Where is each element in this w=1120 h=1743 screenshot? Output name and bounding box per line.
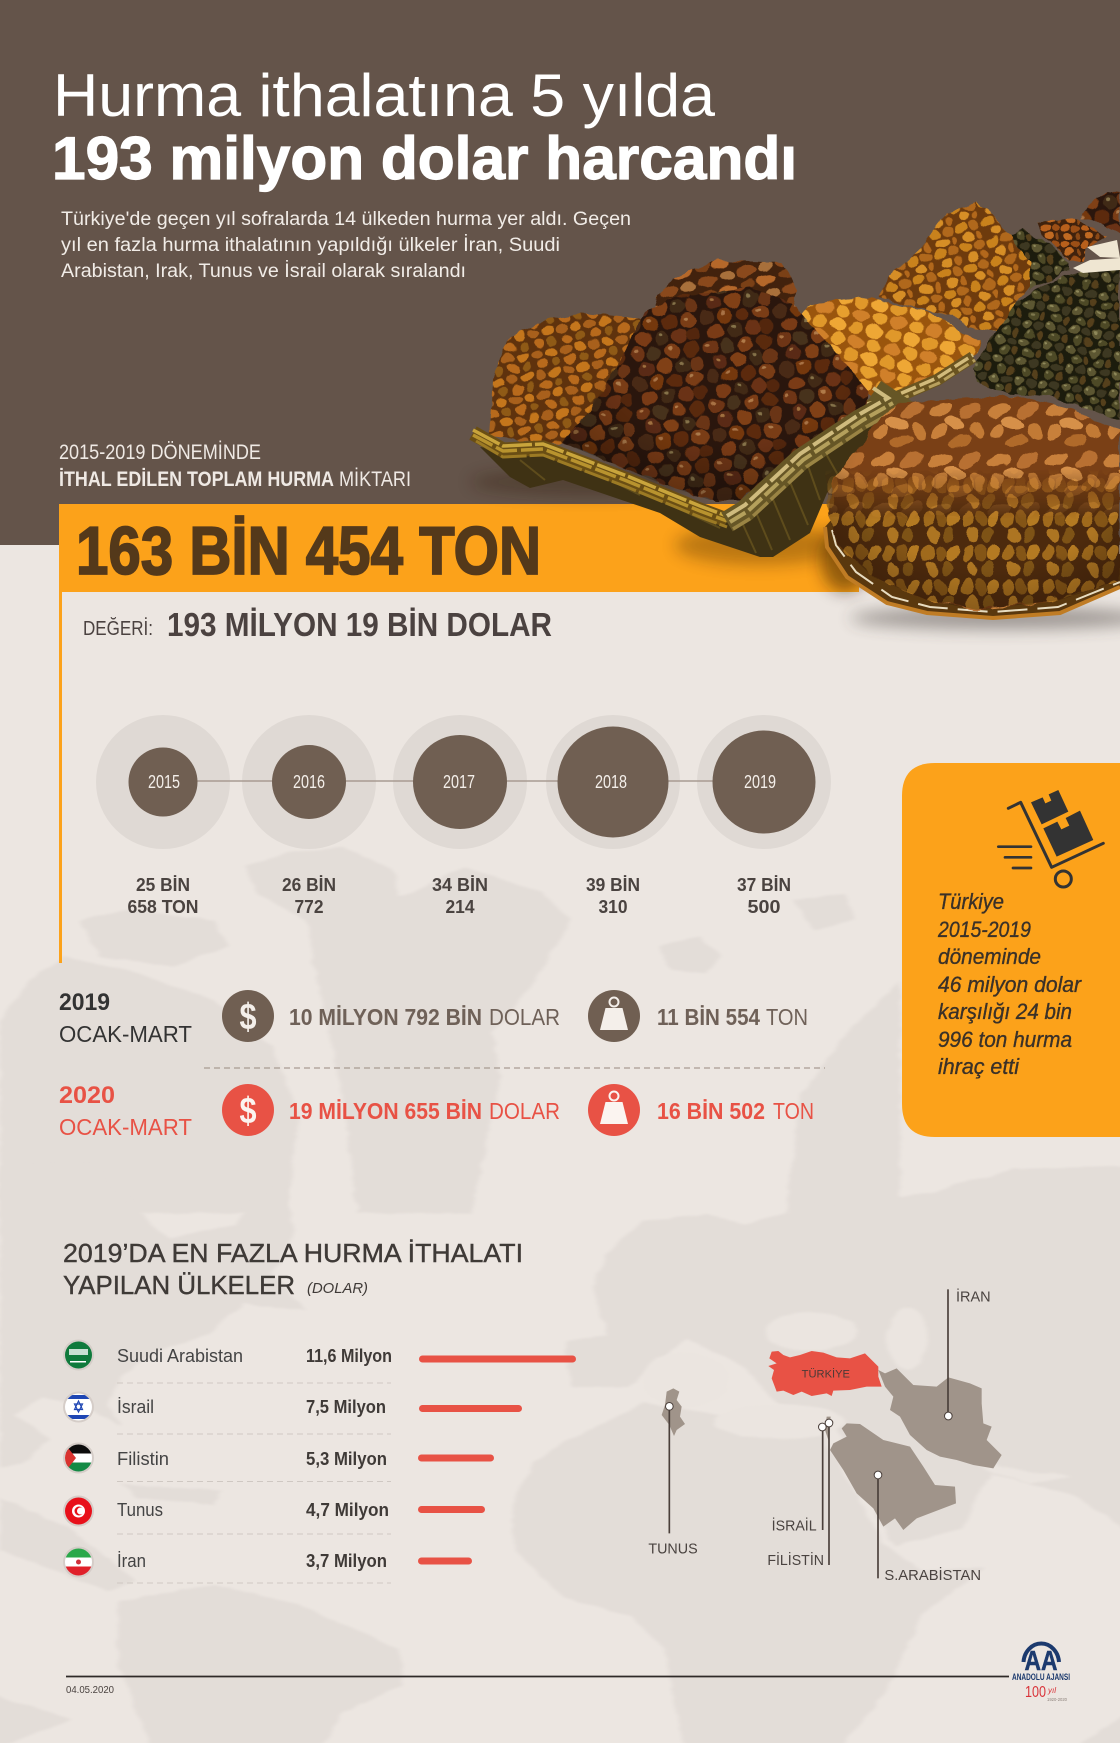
value 2020: DOLAR	[489, 1098, 560, 1124]
icon: Iran flag	[63, 1546, 94, 1578]
date: 04.05.2020	[66, 1685, 114, 1696]
row: Filistin	[63, 1442, 494, 1474]
rear basket rim	[863, 357, 973, 407]
total value line: 193 MİLYON 19 BİN DOLAR	[167, 606, 552, 643]
year labels: 2016	[293, 772, 325, 792]
title	[52, 62, 797, 192]
section heading: YAPILAN ÜLKELER	[63, 1270, 295, 1300]
inner circles scaled by volume	[128, 726, 816, 838]
yearly tonnage labels: 37 BİN	[737, 875, 791, 895]
row: Tunus	[63, 1496, 485, 1526]
row: İsrail	[63, 1392, 522, 1422]
Israel and Palestine shape	[825, 1417, 831, 1440]
year labels: 2015	[148, 772, 180, 792]
country locator map	[648, 1288, 1002, 1584]
intro text block: yıl en fazla hurma ithalatının yapıldığı ülkeler İran, Suudi	[61, 235, 560, 256]
logo: Anadolu Ajansı: ANADOLU AJANSI	[1012, 1672, 1070, 1682]
intro text block: Arabistan, Irak, Tunus ve İsrail olarak sıralandı	[61, 261, 466, 282]
row: Suudi Arabistan	[63, 1340, 576, 1370]
front tray of dates	[825, 397, 1120, 618]
orange total band	[59, 504, 859, 592]
outer circles	[96, 715, 831, 849]
tonnage 2020: TON	[773, 1098, 814, 1124]
pin: Israel	[772, 1423, 826, 1535]
timeline: imports by year	[96, 715, 831, 917]
title: Hurma ithalatına 5 yılda	[53, 62, 716, 129]
pin: Iran	[944, 1288, 991, 1420]
pin: Israel: İSRAİL	[772, 1517, 817, 1535]
Turkey label: TÜRKİYE	[802, 1368, 850, 1381]
ranking table	[63, 1340, 576, 1583]
intro text block: Türkiye'de geçen yıl sofralarda 14 ülkeden hurma yer aldı. Geçen	[61, 209, 631, 230]
icon: weight	[588, 990, 640, 1042]
pin: Palestine: FİLİSTİN	[767, 1551, 824, 1569]
icon: Israel flag	[63, 1392, 94, 1422]
yearly tonnage labels: 34 BİN	[432, 875, 488, 895]
panel: export callout	[902, 763, 1120, 1137]
callout text: Türkiye	[938, 889, 1004, 914]
row label 2019: OCAK-MART	[59, 1021, 192, 1047]
pin: Tunisia	[648, 1402, 698, 1557]
year labels	[148, 772, 776, 792]
orange vertical rule	[59, 592, 62, 963]
callout text: döneminde	[938, 944, 1041, 969]
callout text: 46 milyon dolar	[938, 972, 1083, 997]
map seas	[643, 1307, 1071, 1484]
icon: Tunisia flag	[63, 1496, 94, 1526]
bar	[418, 1558, 472, 1564]
icon: Palestine flag	[63, 1442, 94, 1474]
icon: dollar red: $	[240, 1090, 257, 1131]
yearly tonnage labels: 25 BİN	[136, 875, 190, 895]
date piles, rear	[802, 190, 1120, 420]
period subtitle	[59, 441, 411, 491]
timeline connector	[163, 780, 764, 782]
tray dates, upper	[828, 397, 1120, 610]
Turkey shape	[768, 1351, 882, 1396]
row label 2020	[59, 1082, 192, 1140]
section heading: 2019’DA EN FAZLA HURMA İTHALATI	[63, 1238, 523, 1268]
callout text: 996 ton hurma	[938, 1027, 1072, 1052]
logo: Anadolu Ajansı	[1012, 1643, 1070, 1702]
callout text: 2015-2019	[937, 917, 1031, 942]
bar	[418, 1506, 485, 1513]
row: Suudi Arabistan: 11,6 Milyon	[306, 1345, 392, 1366]
front basket	[473, 388, 896, 557]
row label 2020: 2020	[59, 1082, 115, 1109]
row: İran	[63, 1546, 472, 1578]
period subtitle: 2015-2019 DÖNEMİNDE	[59, 441, 261, 464]
row label 2019: 2019	[59, 989, 110, 1016]
yearly tonnage labels: 214	[446, 897, 474, 917]
year labels: 2017	[443, 772, 475, 792]
value 2020: 19 MİLYON 655 BİN	[289, 1098, 482, 1124]
icon: weight red	[588, 1084, 640, 1136]
callout text: karşılığı 24 bin	[938, 999, 1072, 1024]
header brown panel	[0, 0, 1120, 545]
quarter comparison 2020	[59, 1082, 814, 1140]
bar	[419, 1405, 522, 1412]
Tunisia shape	[662, 1388, 685, 1436]
section heading	[63, 1238, 523, 1300]
row: İsrail: 7,5 Milyon	[306, 1396, 386, 1417]
logo: Anadolu Ajansı: 1920-2020	[1047, 1697, 1067, 1702]
icon: dollar red	[222, 1084, 274, 1136]
golden and brown piles	[490, 260, 796, 445]
world map background, upper	[0, 847, 900, 1213]
yearly tonnage labels: 39 BİN	[586, 875, 640, 895]
value 2019: 10 MİLYON 792 BİN	[289, 1004, 482, 1030]
tonnage 2020: 16 BİN 502	[657, 1098, 765, 1124]
icon: dollar: $	[240, 996, 257, 1037]
row: Filistin: 5,3 Milyon	[306, 1448, 387, 1469]
icon: hand truck with boxes	[998, 790, 1103, 887]
bar	[418, 1454, 494, 1462]
total value line: DEĞERİ:	[83, 617, 153, 640]
row: İran: İran	[117, 1550, 146, 1571]
row label 2020: OCAK-MART	[59, 1114, 192, 1140]
year labels: 2018	[595, 772, 627, 792]
yearly tonnage labels: 500	[748, 897, 780, 917]
yearly tonnage labels: 310	[598, 897, 628, 917]
row: Filistin: Filistin	[117, 1448, 169, 1469]
Saudi Arabia shape	[830, 1423, 956, 1530]
section heading: (DOLAR)	[307, 1280, 368, 1297]
row: Suudi Arabistan: Suudi Arabistan	[117, 1345, 243, 1366]
total tonnage figure: 163 BİN 454 TON	[76, 513, 541, 589]
callout text: ihraç etti	[938, 1054, 1020, 1079]
yearly tonnage labels: 26 BİN	[282, 875, 336, 895]
yearly tonnage labels: 772	[294, 897, 324, 917]
row: İsrail: İsrail	[117, 1396, 154, 1417]
period subtitle: MİKTARI	[339, 468, 411, 491]
icon: Saudi flag	[63, 1340, 94, 1370]
photo shadows	[470, 468, 1120, 629]
central dark date pile	[563, 288, 868, 500]
year labels: 2019	[744, 772, 776, 792]
yearly tonnage labels	[128, 875, 791, 917]
pin: Saudi Arabia	[874, 1471, 981, 1584]
pin: Tunisia: TUNUS	[648, 1541, 698, 1557]
tonnage 2019: TON	[766, 1004, 808, 1030]
logo: Anadolu Ajansı: AA	[1024, 1645, 1058, 1676]
pin: Saudi Arabia: S.ARABİSTAN	[884, 1566, 981, 1584]
world map background, lower	[0, 1165, 1120, 1743]
tonnage 2019: 11 BİN 554	[657, 1004, 760, 1030]
title: 193 milyon dolar harcandı	[52, 125, 797, 192]
row: Tunus: Tunus	[117, 1499, 163, 1520]
icon: dollar	[222, 990, 274, 1042]
period subtitle: İTHAL EDİLEN TOPLAM HURMA	[59, 468, 334, 491]
logo: Anadolu Ajansı: 100	[1025, 1684, 1046, 1701]
yearly tonnage labels: 658 TON	[128, 897, 198, 917]
row: Tunus: 4,7 Milyon	[306, 1499, 389, 1520]
cream wrapping	[1073, 240, 1120, 273]
value 2019: DOLAR	[489, 1004, 560, 1030]
row: İran: 3,7 Milyon	[306, 1550, 387, 1571]
row label 2019	[59, 989, 192, 1047]
tray dates, lower	[826, 470, 1120, 608]
logo: Anadolu Ajansı: yıl	[1047, 1686, 1056, 1695]
intro text block	[61, 209, 631, 282]
pin: Iran: İRAN	[956, 1288, 991, 1306]
bar	[419, 1356, 576, 1362]
Iran shape	[878, 1368, 1002, 1468]
callout text	[937, 889, 1083, 1079]
quarter comparison 2019	[59, 989, 808, 1047]
photo: baskets of dates	[470, 190, 1120, 629]
pin: Palestine	[767, 1419, 833, 1569]
